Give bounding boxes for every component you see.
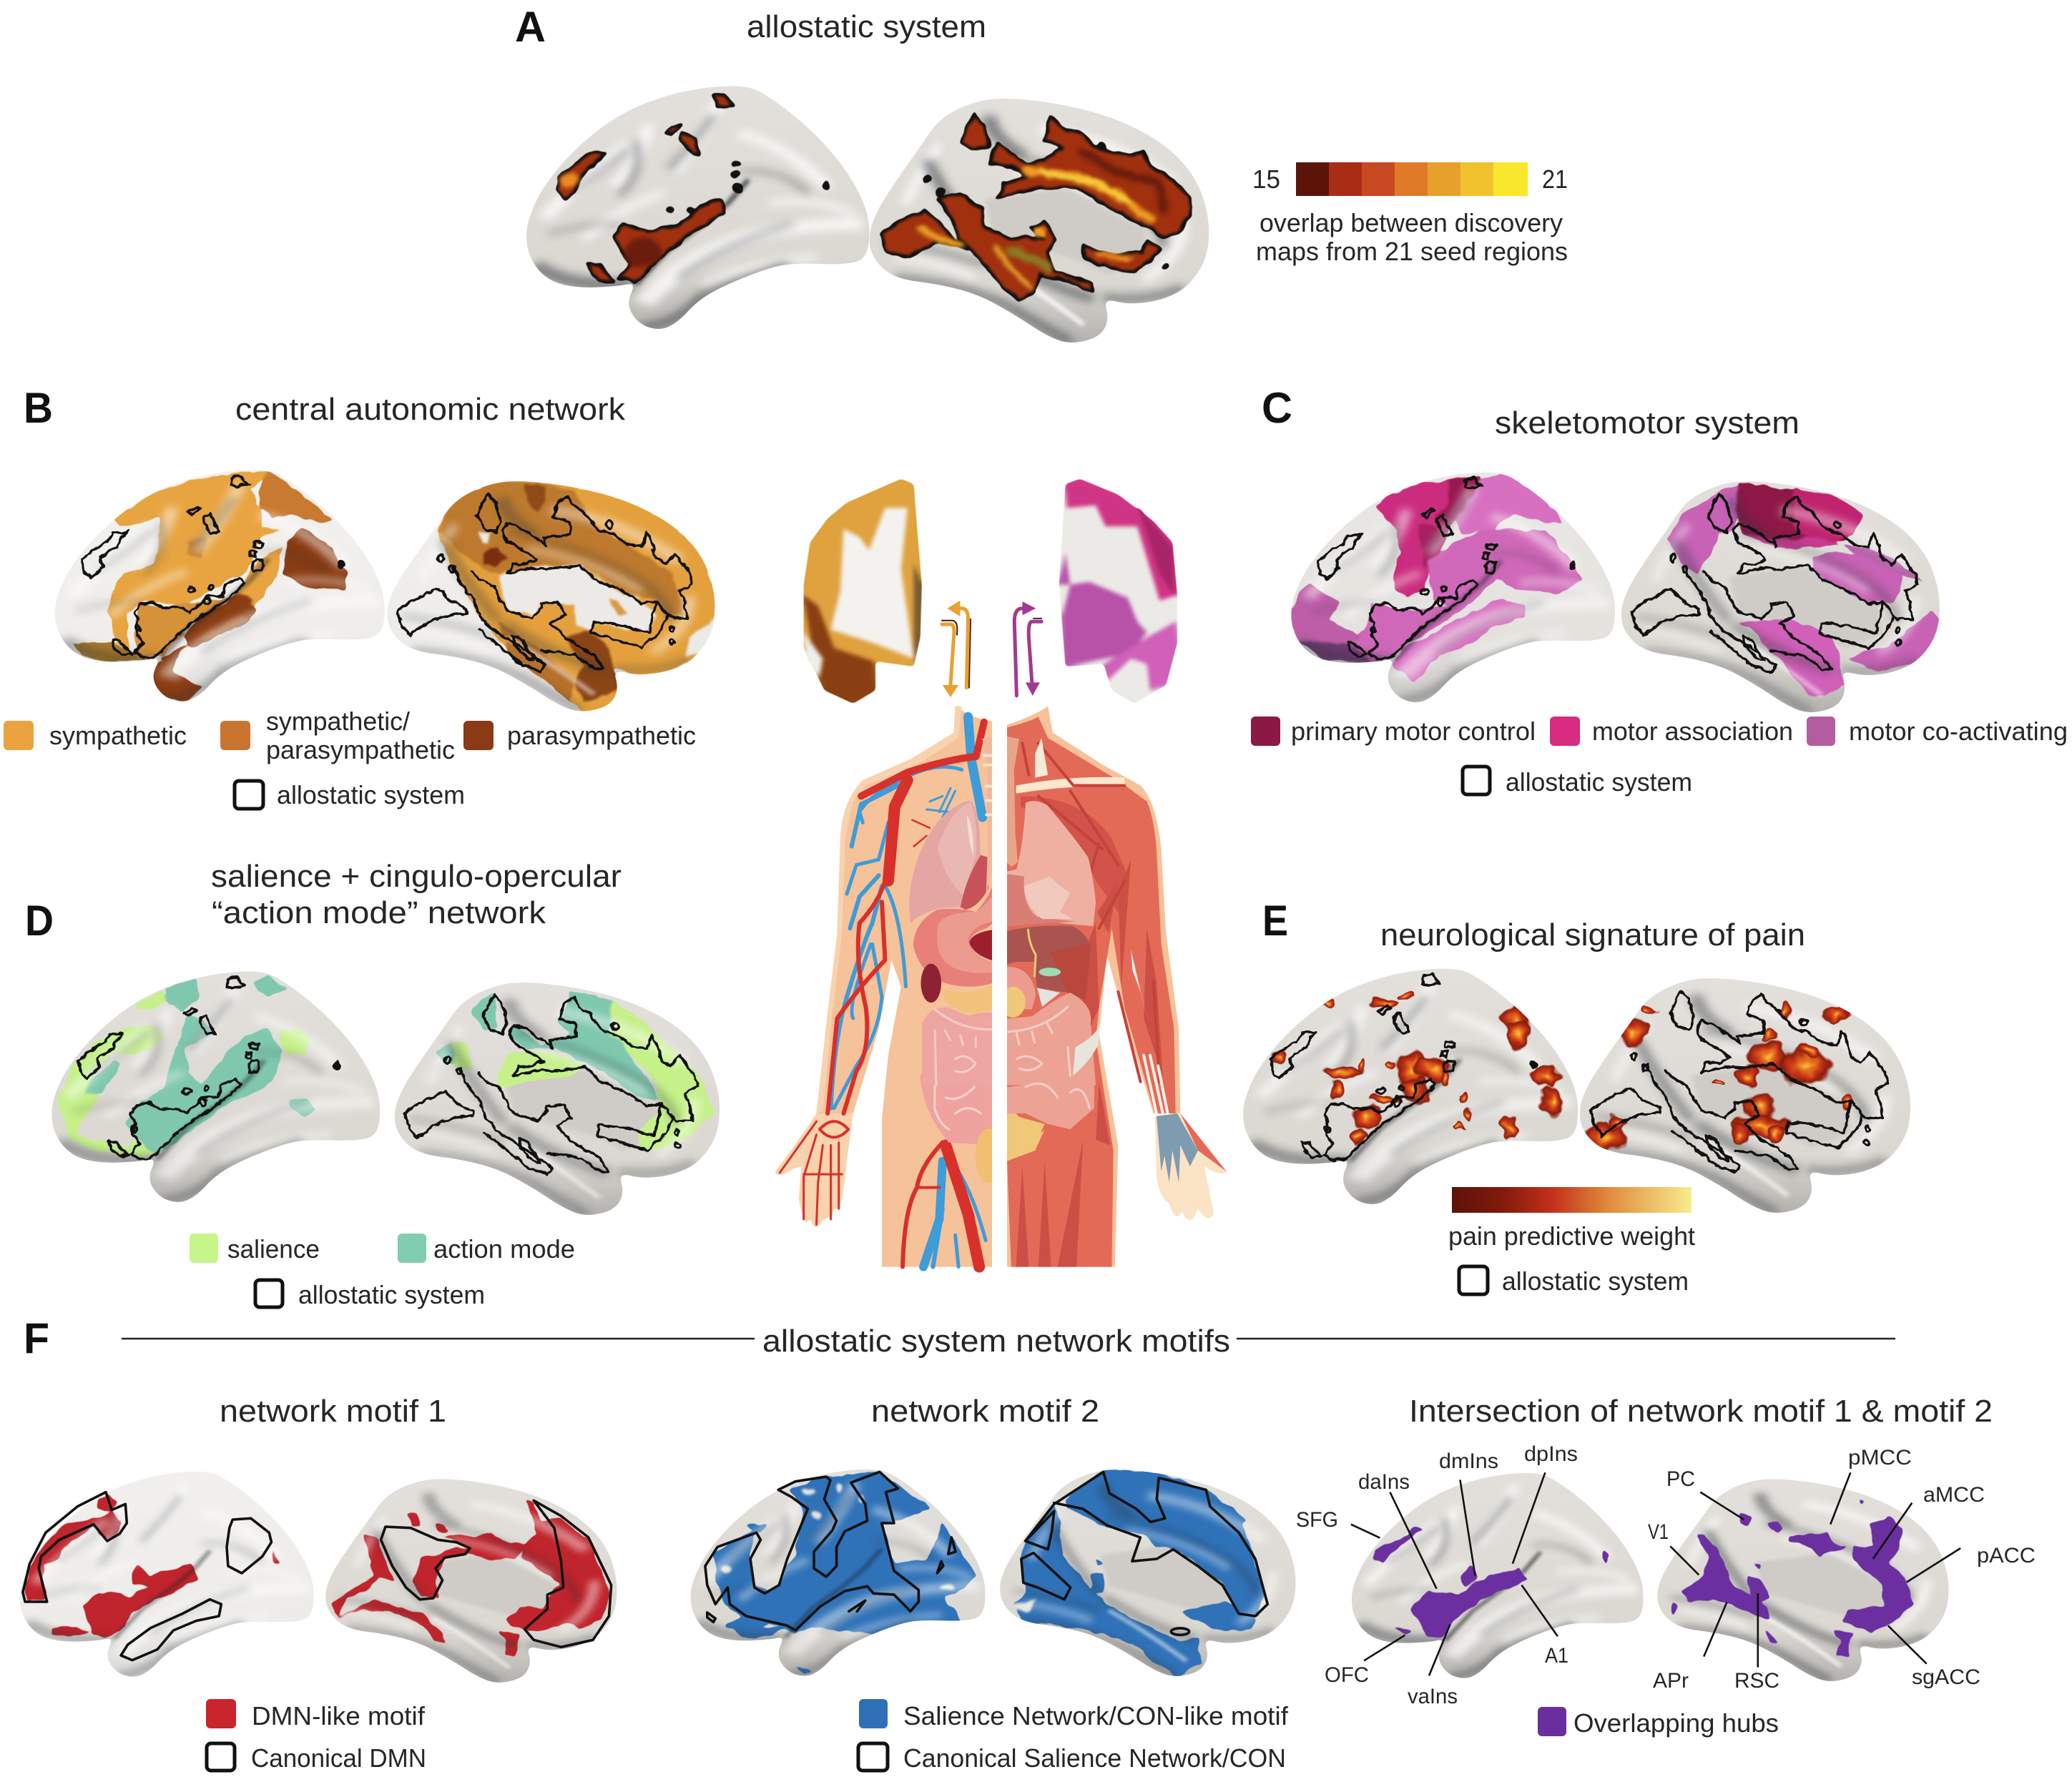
hub labels: V1	[1648, 1520, 1669, 1544]
legend: sympathetic/parasympathetic: sympathetic/	[266, 707, 410, 736]
brain: lateral DMN-like motif	[20, 1472, 314, 1677]
legend: canonical DMN: Canonical DMN	[251, 1743, 426, 1773]
arrows: skeletomotor	[1014, 601, 1041, 696]
legend: motor co-activating: motor co-activating	[1849, 717, 2068, 746]
body: muscular half	[992, 707, 1227, 1272]
heading: salience + cingulo-opercular action mode network	[211, 859, 622, 930]
colour bar caption: pain predictive weight	[1448, 1221, 1695, 1251]
brain: medial pain map	[1580, 978, 1910, 1213]
legend: allostatic system outline: allostatic system	[1502, 1266, 1689, 1296]
brain: medial overlapping hubs	[1657, 1479, 1949, 1681]
legend: allostatic system outline: allostatic system	[1506, 767, 1692, 797]
legend: primary motor control: primary motor control	[1291, 717, 1536, 746]
heading: skeletomotor system: skeletomotor system	[1495, 405, 1800, 440]
panel A: allostatic system	[515, 3, 1568, 343]
brain: medial overlap map	[870, 99, 1209, 343]
brain: medial skeletomotor map	[1621, 481, 1947, 712]
heading: network motif 2: network motif 2	[871, 1394, 1099, 1429]
panel C: skeletomotor system	[1251, 384, 2068, 797]
hub labels: SFG	[1296, 1508, 1338, 1532]
panel letter D: D	[25, 897, 54, 945]
heading: intersection of motifs: Intersection of network motif 1 & motif 2	[1409, 1394, 1993, 1429]
central illustration: brain sections and body	[775, 479, 1227, 1272]
leader lines for hub labels	[1351, 1472, 1960, 1675]
section heading: network motifs: allostatic system network motifs	[762, 1324, 1230, 1359]
hub labels: RSC	[1734, 1669, 1779, 1693]
cross-section brain: skeletomotor	[1059, 479, 1177, 704]
legend: overlapping hubs: Overlapping hubs	[1573, 1708, 1779, 1738]
heading: central autonomic network: central autonomic network	[235, 392, 626, 427]
brain: lateral skeletomotor map	[1290, 473, 1615, 702]
brain: medial autonomic map	[388, 481, 719, 713]
legend: sympathetic/parasympathetic: parasympathetic	[266, 735, 455, 764]
cross-section brain: autonomic	[804, 479, 922, 704]
heading: salience + cingulo-opercular action mode network: salience + cingulo-opercular	[211, 859, 622, 894]
hub labels: sgACC	[1912, 1665, 1980, 1689]
legend: motor association: motor association	[1592, 717, 1793, 746]
panel letter C: C	[1262, 384, 1292, 432]
hub labels: dmIns	[1439, 1449, 1498, 1473]
hub labels: dpIns	[1524, 1442, 1578, 1466]
hub labels: aMCC	[1923, 1483, 1985, 1507]
hub labels: daIns	[1358, 1470, 1410, 1494]
brain: lateral salience motif	[691, 1470, 986, 1676]
legend: parasympathetic: parasympathetic	[507, 721, 696, 750]
panel E: neurological signature of pain	[1243, 897, 1910, 1296]
legend: sympathetic: sympathetic	[49, 721, 187, 750]
brain: lateral overlapping hubs	[1352, 1473, 1644, 1678]
legend: allostatic system outline: allostatic system	[298, 1280, 485, 1309]
heading: network motif 1: network motif 1	[220, 1394, 446, 1429]
legend: DMN-like motif: DMN-like motif	[252, 1701, 426, 1731]
legend: sympathetic/parasympathetic	[220, 707, 455, 764]
hub labels: pMCC	[1848, 1446, 1912, 1470]
hub labels	[1296, 1442, 2036, 1708]
legend: action mode: action mode	[433, 1234, 575, 1264]
body: circulatory and organs half	[775, 707, 1002, 1267]
brain: medial DMN-like motif	[325, 1479, 617, 1683]
legend: allostatic system outline: allostatic system	[277, 780, 465, 809]
brain: medial salience motif	[1000, 1470, 1296, 1677]
colour scale caption: overlap between discovery	[1260, 208, 1563, 237]
brain: lateral overlap map	[526, 86, 869, 329]
legend: salience: salience	[227, 1234, 320, 1264]
panel D: salience and action mode network	[25, 859, 720, 1309]
panel letter E: E	[1262, 897, 1288, 945]
panel letter A: A	[515, 3, 546, 51]
colour scale: overlap 15 to 21: 21	[1542, 164, 1568, 194]
colour scale caption: maps from 21 seed regions	[1256, 237, 1568, 266]
panel F: allostatic system network motifs	[20, 1314, 2036, 1773]
hub labels: PC	[1666, 1467, 1695, 1491]
legend: canonical salience network: Canonical Salience Network/CON	[903, 1743, 1286, 1773]
colour bar: pain predictive weight	[1452, 1187, 1692, 1213]
brain: lateral pain map	[1243, 969, 1578, 1204]
arrows: autonomic	[942, 601, 971, 697]
panel letter B: B	[24, 384, 53, 432]
panel B: central autonomic network	[4, 384, 719, 809]
hub labels: pACC	[1977, 1544, 2036, 1567]
hub labels: OFC	[1325, 1663, 1369, 1687]
heading: allostatic system: allostatic system	[747, 9, 986, 44]
brain: medial salience map	[395, 983, 720, 1215]
legend: salience	[190, 1234, 320, 1264]
brain: lateral autonomic map	[55, 470, 385, 703]
heading: salience + cingulo-opercular action mode network: “action mode” network	[212, 895, 546, 930]
hub labels: APr	[1653, 1669, 1689, 1693]
brain: lateral salience map	[51, 972, 380, 1202]
hub labels: vaIns	[1408, 1685, 1458, 1708]
heading: neurological signature of pain: neurological signature of pain	[1380, 917, 1805, 953]
panel letter F: F	[24, 1314, 49, 1362]
colour scale: overlap 15 to 21: 15	[1252, 164, 1280, 194]
colour scale: overlap 15 to 21	[1252, 162, 1568, 196]
legend: salience network motif: Salience Network/CON-like motif	[903, 1701, 1289, 1731]
colour scale caption	[1256, 208, 1568, 266]
hub labels: A1	[1545, 1644, 1568, 1668]
